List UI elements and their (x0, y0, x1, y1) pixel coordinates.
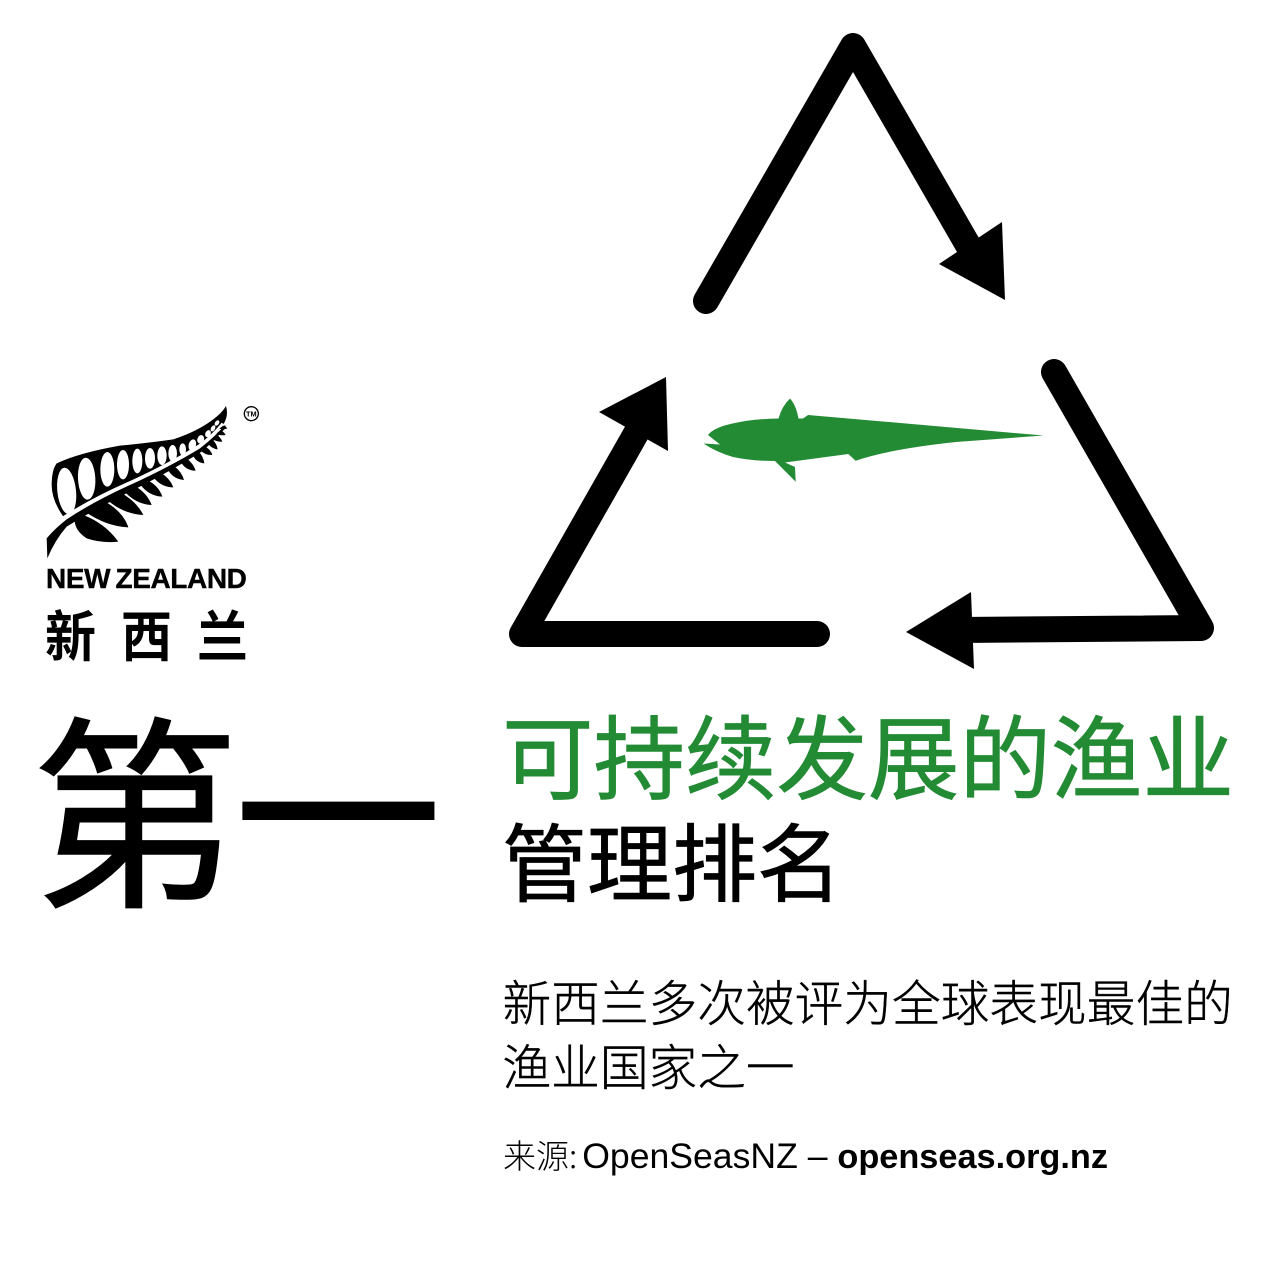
icon: silver fern (46, 406, 259, 558)
body text: 新西兰多次被评为全球表现最佳的 (502, 966, 1233, 1036)
body text (502, 966, 1233, 1100)
icon: trademark: TM (246, 409, 257, 418)
arrow: top (706, 46, 1005, 301)
logo wordmark: NEW ZEALAND: NEW ZEALAND (46, 563, 246, 594)
heading: sustainable fisheries: 可持续发展的渔业 (502, 687, 1234, 819)
logo wordmark: 新西兰: 新西兰 (45, 593, 273, 673)
upper frond mass (52, 406, 227, 517)
icon: trademark (244, 407, 258, 421)
white pinnae (55, 419, 220, 515)
arrow: right (906, 372, 1201, 669)
lower pinnae (75, 426, 227, 542)
source line: 来源:OpenSeasNZ – openseas.org.nz (503, 1130, 1108, 1178)
stem (47, 425, 226, 558)
arrow: left (522, 377, 817, 634)
heading: management ranking: 管理排名 (502, 797, 842, 920)
logo: New Zealand fern mark (45, 406, 273, 673)
big ranking: first: 第一 (31, 653, 437, 950)
white rib (62, 423, 223, 518)
icon: green fish (704, 398, 1044, 482)
body text: 渔业国家之一 (502, 1030, 795, 1100)
